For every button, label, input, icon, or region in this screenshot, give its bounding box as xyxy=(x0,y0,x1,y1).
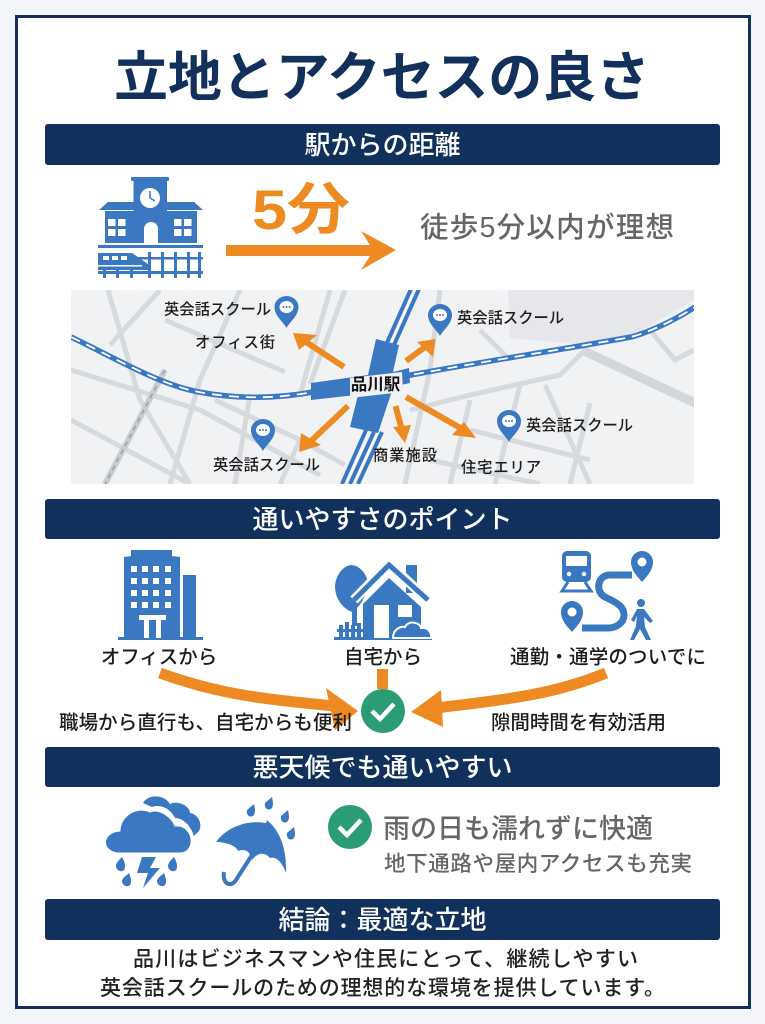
heading: distance from station xyxy=(45,124,720,165)
icon: office building xyxy=(118,550,203,640)
heading: bad weather: 悪天候でも通いやすい xyxy=(252,752,513,782)
map labels: 品川駅 xyxy=(351,376,401,394)
map labels: 英会話スクール xyxy=(213,457,320,474)
icon: green check xyxy=(361,689,405,733)
text: conclusion body xyxy=(100,948,665,1000)
icon: station with train xyxy=(98,177,203,278)
text: conclusion body: 英会話スクールのための理想的な環境を提供しています。 xyxy=(100,977,665,1000)
map labels: 商業施設 xyxy=(373,448,437,464)
5 minutes label: 5分 xyxy=(252,178,350,241)
heading: ease of commuting xyxy=(45,499,720,539)
icon: green check small xyxy=(328,805,372,849)
icon: commute route xyxy=(561,551,653,640)
map arrows xyxy=(303,340,464,442)
icon: umbrella with rain xyxy=(216,797,295,884)
labels: commute options xyxy=(101,646,706,668)
school pins xyxy=(251,296,521,451)
text: benefits: 職場から直行も、自宅からも便利 xyxy=(59,712,352,734)
map labels: 英会話スクール xyxy=(164,302,271,318)
labels: commute options: オフィスから xyxy=(101,646,217,668)
arrows: converge on check xyxy=(160,669,606,730)
text: benefits xyxy=(59,712,666,734)
text: ideal walking time: 徒歩5分以内が理想 xyxy=(420,212,674,244)
panel: area map xyxy=(71,289,695,484)
arrow: five minute walk xyxy=(226,231,396,270)
text: conclusion body: 品川はビジネスマンや住民にとって、継続しやすい xyxy=(133,948,638,971)
map labels: 英会話スクール xyxy=(526,418,633,434)
station block xyxy=(311,339,410,433)
heading: bad weather xyxy=(45,747,720,787)
heading: conclusion: 結論：最適な立地 xyxy=(278,905,487,935)
heading: ease of commuting: 通いやすさのポイント xyxy=(252,504,513,534)
text: stay dry xyxy=(383,814,692,876)
icon: house with tree xyxy=(334,564,432,640)
labels: commute options: 自宅から xyxy=(344,646,422,668)
title: 立地とアクセスの良さ xyxy=(114,48,650,108)
text: benefits: 隙間時間を有効活用 xyxy=(491,712,666,734)
text: stay dry: 地下通路や屋内アクセスも充実 xyxy=(384,852,692,876)
map labels: オフィス街 xyxy=(195,334,275,352)
icon: storm cloud xyxy=(105,796,200,888)
map labels: 住宅エリア xyxy=(461,460,541,476)
text: stay dry: 雨の日も濡れずに快適 xyxy=(383,814,653,844)
map labels xyxy=(164,302,633,476)
labels: commute options: 通勤・通学のついでに xyxy=(510,646,706,668)
heading: distance from station: 駅からの距離 xyxy=(304,130,461,160)
map labels: 英会話スクール xyxy=(457,310,564,327)
heading: conclusion xyxy=(45,899,720,940)
